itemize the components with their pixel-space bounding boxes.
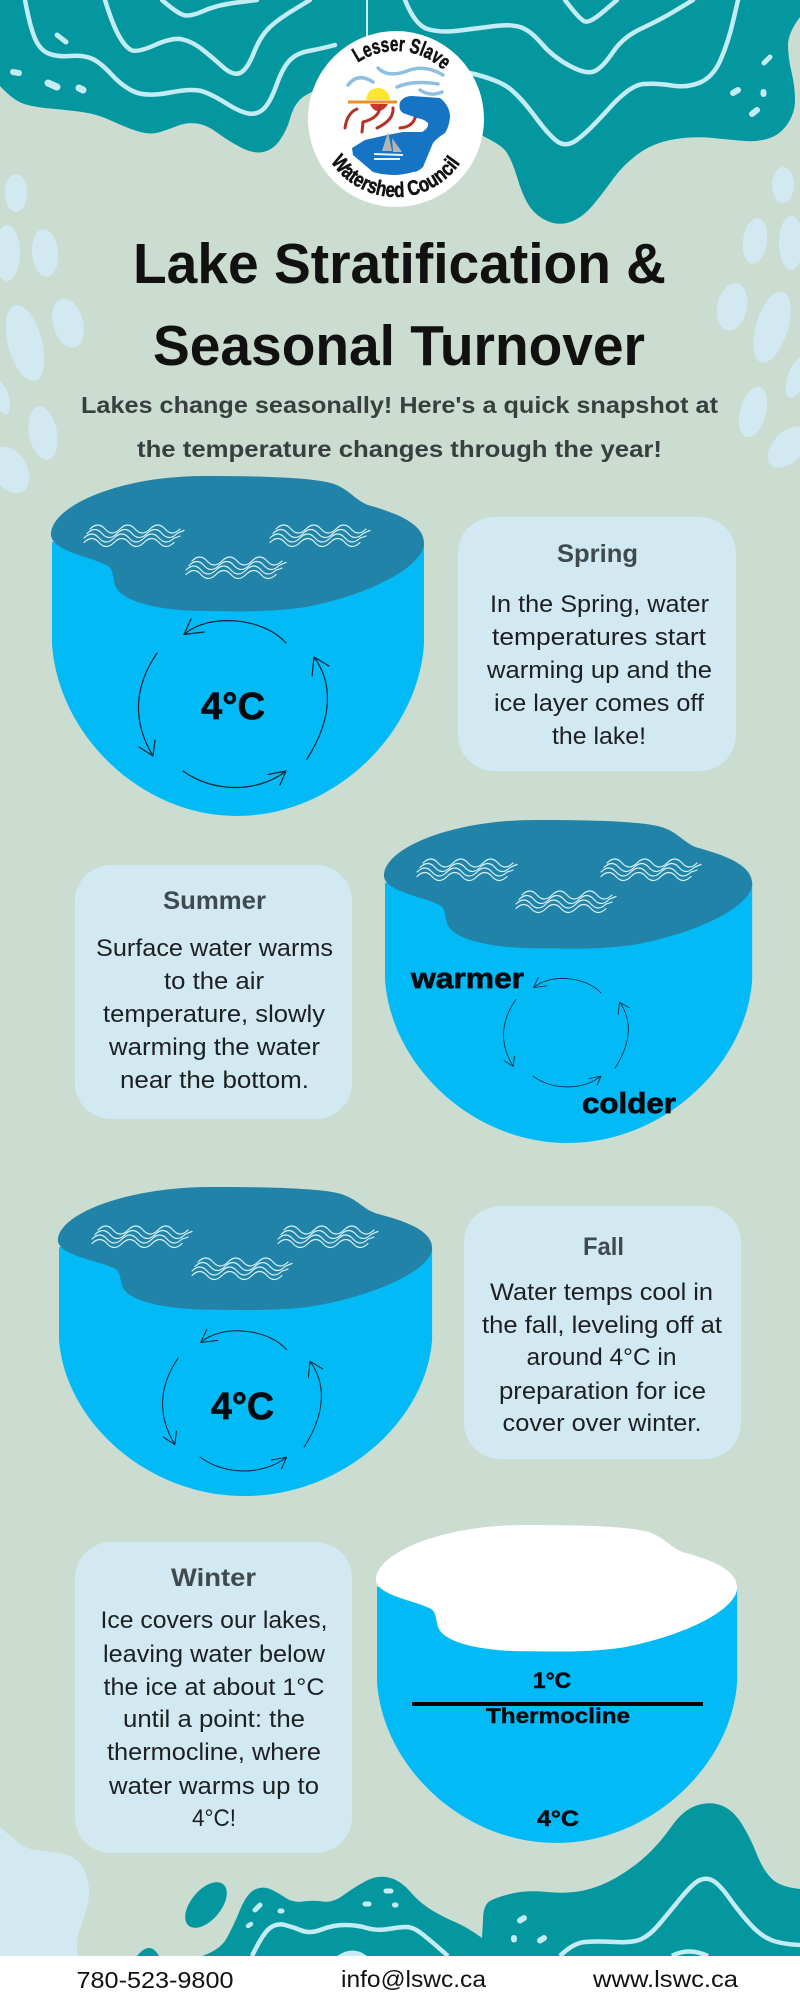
text: winter description: until a point: the (123, 1706, 305, 1733)
heading: Winter: Winter (171, 1564, 256, 1592)
text: summer description: near the bottom. (120, 1067, 309, 1094)
label: 1°C: 1°C (533, 1668, 571, 1693)
panel: spring lake diagram (51, 476, 424, 816)
text: winter description: the ice at about 1°C (104, 1674, 324, 1701)
website: www.lswc.ca (592, 1966, 738, 1992)
panel: winter text card (75, 1542, 352, 1853)
label: Thermocline: Thermocline (486, 1705, 630, 1728)
text: summer description: to the air (164, 968, 264, 995)
text: summer description (96, 935, 333, 1094)
title: Lake Stratification & (133, 232, 666, 296)
heading: Fall: Fall (583, 1233, 624, 1261)
text: winter description (100, 1607, 328, 1832)
text: winter description: thermocline, where (107, 1739, 321, 1766)
logo artwork: waves, sun, lake, cliffs, boat (345, 68, 450, 175)
email: info@lswc.ca (341, 1966, 486, 1992)
panel: summer lake diagram (384, 820, 752, 1143)
heading: Summer: Summer (163, 887, 266, 915)
text: fall description: around 4°C in (526, 1344, 676, 1371)
thermocline line (412, 1702, 703, 1706)
text: fall description: Water temps cool in (490, 1279, 713, 1306)
text: spring description: In the Spring, water (490, 591, 709, 618)
logo arc text: Lesser Slave: Lesser Slave (351, 38, 449, 69)
logo: Lesser Slave Watershed Council (308, 31, 484, 207)
heading: Spring: Spring (557, 540, 638, 568)
text: winter description: 4°C! (192, 1805, 236, 1832)
label: warmer: warmer (410, 963, 524, 995)
phone: 780-523-9800 (76, 1967, 234, 1993)
side blobs: left (0, 174, 89, 500)
subtitle: Lakes change seasonally! Here's a quick snapshot at (81, 392, 718, 418)
panel: fall text card (464, 1206, 741, 1459)
footer contact bar (0, 1956, 800, 2000)
text: winter description: Ice covers our lakes, (100, 1607, 328, 1634)
text: spring description: ice layer comes off (494, 690, 704, 717)
text: spring description (486, 591, 712, 750)
text: fall description: preparation for ice (499, 1378, 706, 1405)
panel: summer text card (75, 865, 352, 1119)
text: spring description: warming up and the (486, 657, 712, 684)
text: spring description: the lake! (552, 723, 646, 750)
text: winter description: leaving water below (103, 1641, 326, 1668)
text: fall description (482, 1279, 722, 1437)
side blobs: right (712, 167, 800, 475)
label: colder: colder (582, 1088, 676, 1120)
panel: spring text card (458, 517, 736, 771)
panel: winter lake diagram (376, 1525, 737, 1843)
logo arc text: Watershed Council: Watershed Council (332, 152, 460, 198)
text: spring description: temperatures start (492, 624, 706, 651)
title (133, 232, 666, 378)
bottom left light blob (0, 1827, 89, 1956)
bottom teal wave with light lines (137, 1803, 800, 1956)
label: 4°C bottom: 4°C (537, 1806, 579, 1831)
text: winter description: water warms up to (108, 1773, 319, 1800)
text: summer description: temperature, slowly (103, 1001, 325, 1028)
header teal wave with light lines (0, 0, 800, 224)
text: summer description: Surface water warms (96, 935, 333, 962)
label: 4°C: 4°C (201, 686, 265, 728)
panel: fall lake diagram (58, 1187, 432, 1496)
label: 4°C: 4°C (211, 1386, 274, 1428)
subtitle (81, 392, 718, 462)
subtitle: the temperature changes through the year! (137, 436, 662, 462)
text: fall description: cover over winter. (502, 1410, 702, 1437)
text: fall description: the fall, leveling off at (482, 1312, 722, 1339)
title: Seasonal Turnover (153, 314, 645, 378)
text: summer description: warming the water (108, 1034, 320, 1061)
